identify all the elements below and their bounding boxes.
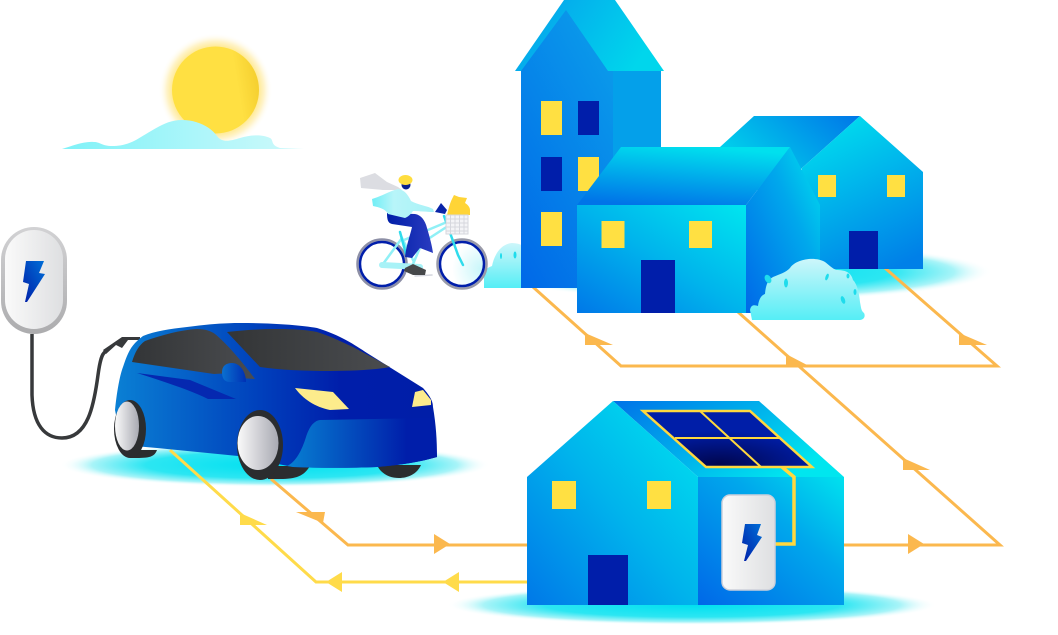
windows: [552, 481, 576, 509]
door: [641, 260, 675, 313]
energy flow lines: [170, 268, 1000, 582]
rider trousers: [387, 213, 433, 258]
bumper: [287, 418, 437, 468]
line: car to solar house: [271, 479, 530, 545]
cloud: [62, 120, 304, 149]
side wall: [613, 71, 661, 221]
solar panel: [643, 411, 812, 467]
body: [115, 323, 437, 468]
front wall: [521, 10, 613, 288]
cyclist with dog: [358, 173, 486, 288]
house: front middle: [577, 147, 820, 313]
icon: lightning bolt: [23, 261, 45, 302]
arrow: car line orange: [434, 534, 450, 554]
bike frame: [382, 216, 463, 276]
arrow: car diagonal orange: [296, 512, 325, 523]
electric car: [114, 323, 437, 480]
mirror: [222, 363, 246, 382]
arrow: car diagonal yellow: [240, 513, 267, 525]
front wheel: [438, 240, 486, 288]
basket: [446, 215, 468, 234]
sun: [158, 33, 272, 147]
side wall: [698, 477, 844, 605]
arrow: house output: [908, 534, 924, 554]
solar wire: [774, 467, 794, 544]
wall charger: [1, 227, 67, 334]
scarf: [360, 173, 402, 190]
line: upper houses grid loop: [533, 268, 997, 366]
ground glow: upper houses: [492, 243, 992, 301]
arrow: upper centre: [786, 354, 809, 366]
right tyre: [377, 465, 421, 478]
windows: [541, 101, 562, 135]
house: tall tower: [515, 0, 664, 288]
arrow: yellow left near car: [326, 572, 342, 592]
windows: [602, 221, 624, 248]
ground glow: solar house: [447, 585, 937, 625]
far rear tyre: [125, 450, 157, 458]
rider torso: [372, 189, 434, 218]
front wheel: [237, 410, 283, 480]
bush: right of middle house: [750, 259, 865, 320]
door: [849, 231, 878, 269]
hand on handlebar: [435, 203, 447, 214]
arrow: yellow left near house: [443, 572, 459, 592]
windshield: [227, 329, 390, 371]
side wall: [746, 147, 820, 313]
roof: [613, 401, 844, 477]
ground glow: car: [60, 443, 490, 487]
headlight: far: [412, 390, 431, 407]
charger plug: [103, 337, 140, 354]
front wall: [577, 205, 746, 313]
front lower tyre: [268, 466, 310, 479]
icon: lightning bolt: [742, 524, 762, 561]
arrow: upper right: [959, 333, 987, 345]
front wall: [800, 116, 923, 269]
shoe: [404, 264, 426, 275]
arrow: upper left: [585, 333, 613, 345]
house: solar and battery: [527, 401, 844, 605]
side window: [132, 329, 255, 379]
line: grid to solar house: [738, 312, 1000, 545]
front wall: [527, 401, 698, 605]
arrowheads: [240, 333, 987, 592]
roof: [577, 147, 790, 205]
roof: [515, 0, 664, 71]
headlight: near: [295, 388, 349, 410]
head and helmet: [398, 175, 412, 190]
dog: [447, 195, 470, 215]
rear wheel: [358, 240, 406, 288]
line: solar house to car: [170, 450, 530, 582]
arrow: right diagonal: [903, 458, 930, 470]
house: back right: [720, 116, 923, 269]
bush: left of tower: [484, 243, 524, 288]
charger cable: [32, 334, 105, 438]
roof: [720, 116, 860, 190]
windows: [818, 175, 836, 197]
home battery: [722, 495, 775, 590]
rear wheel: [114, 400, 146, 458]
door: [588, 555, 628, 605]
door crease: [137, 373, 236, 399]
